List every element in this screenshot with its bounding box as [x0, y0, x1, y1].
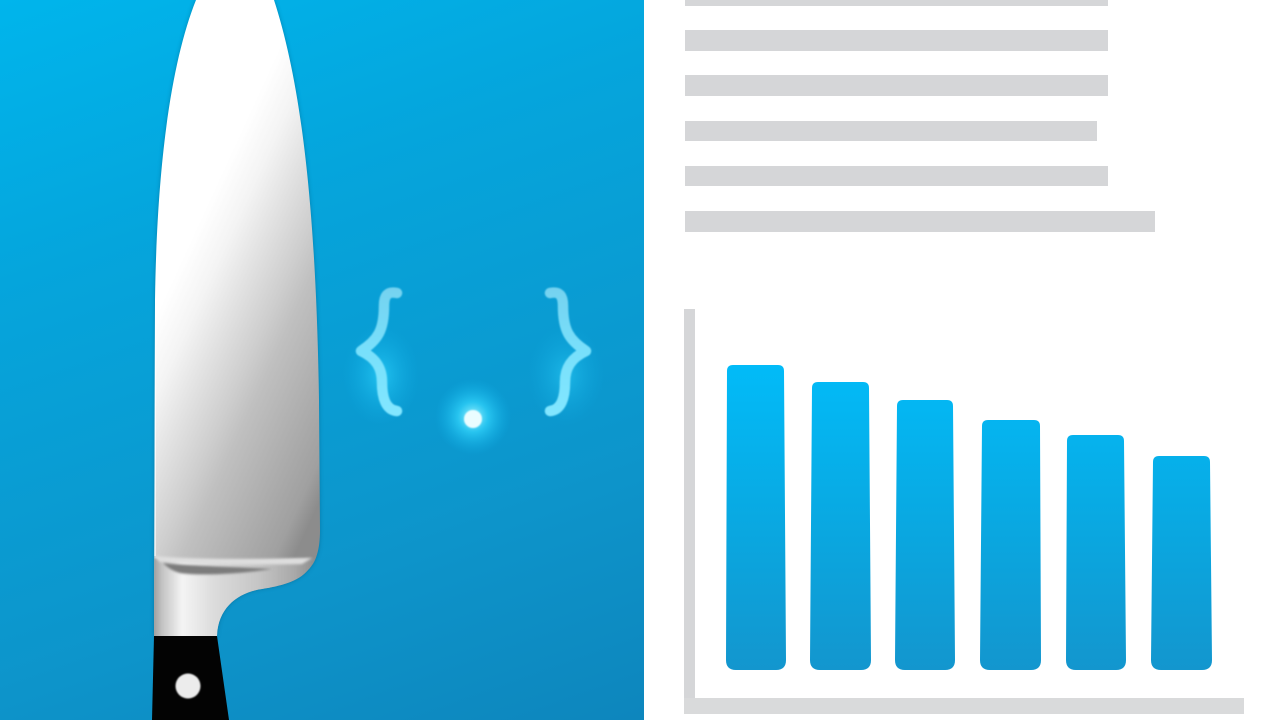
bar 5: [1066, 435, 1126, 670]
right brace: [550, 293, 586, 411]
icon: chef knife: [150, 0, 325, 720]
bar 6: [1151, 456, 1212, 670]
x axis: [684, 698, 1244, 714]
knife blade: [154, 0, 320, 636]
knife bolster: [154, 316, 316, 636]
left brace: [361, 293, 397, 411]
y axis: [684, 309, 695, 714]
bar 1: [726, 365, 786, 670]
glowing dot: [464, 410, 482, 428]
bar chart: [684, 309, 1244, 714]
bar 3: [895, 400, 955, 670]
knife left edge highlight: [154, 316, 156, 556]
panel: blue background: [0, 0, 644, 720]
knife rivet: [176, 674, 200, 698]
glowing dot halo: [435, 379, 511, 455]
knife heel highlight: [154, 556, 312, 564]
left brace glow: [343, 325, 419, 425]
bar 2: [810, 382, 871, 670]
right brace glow: [528, 325, 604, 425]
knife heel groove: [163, 563, 272, 574]
panel: white document: [644, 0, 1280, 720]
bar 4: [980, 420, 1041, 670]
icon: glowing braces with dot: [343, 293, 604, 455]
knife handle: [152, 636, 229, 720]
text lines placeholder: [685, 0, 1155, 232]
